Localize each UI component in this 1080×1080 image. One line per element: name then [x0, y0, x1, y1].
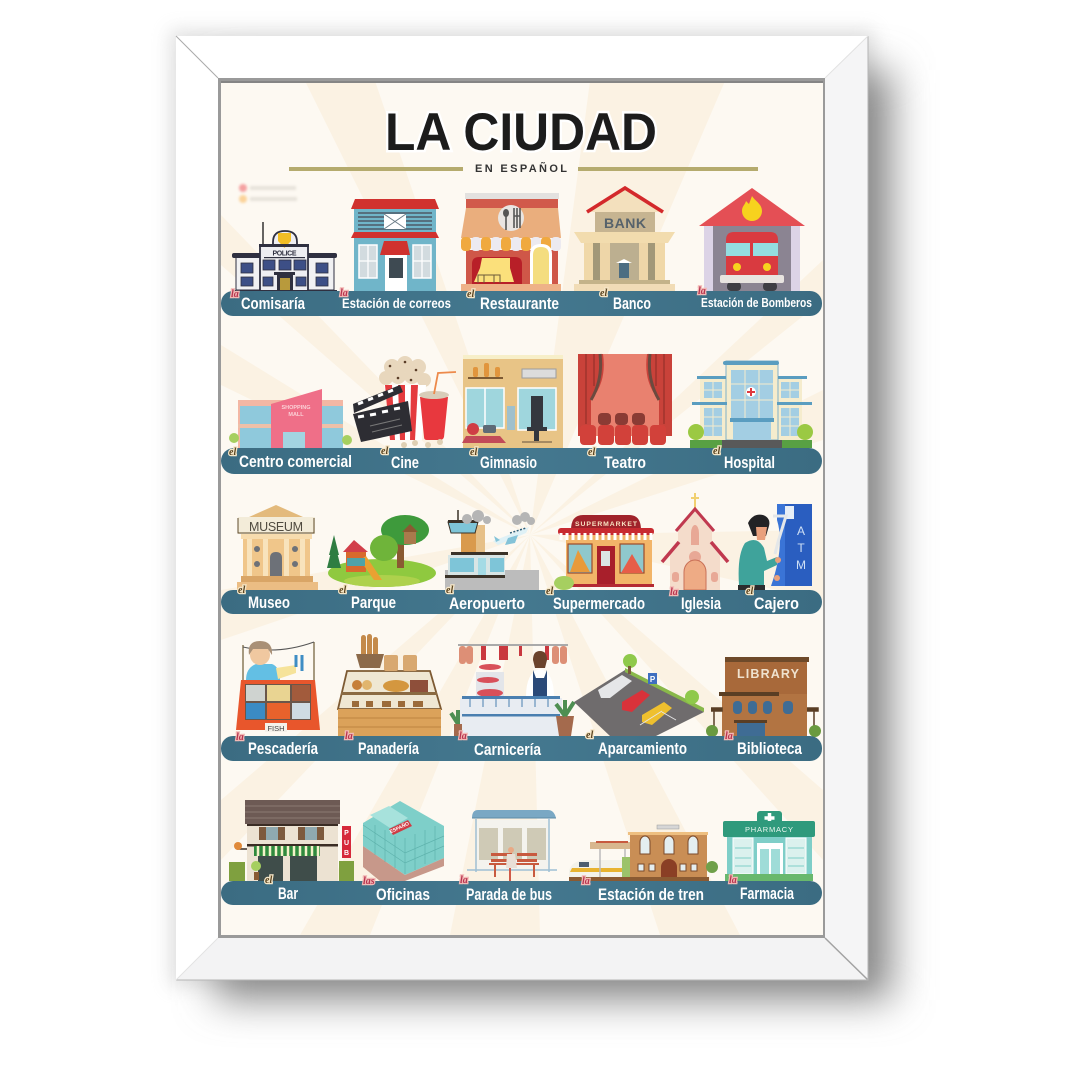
row 2 shelf: el	[588, 447, 595, 458]
icon: ATM with person	[738, 504, 812, 590]
row 1 shelf: Estación de Bomberos	[701, 296, 812, 310]
icon: police station: POLICE	[272, 250, 297, 258]
row 4 shelf: la	[459, 731, 467, 742]
row 2 shelf: Hospital	[724, 453, 775, 472]
row 4 shelf: la	[236, 732, 244, 743]
drop shadow of frame	[170, 30, 892, 1000]
poster background with rays	[221, 78, 823, 935]
icon: church	[662, 493, 728, 590]
row 1 shelf: la	[340, 288, 348, 299]
row 4 shelf: Panadería	[358, 739, 419, 758]
subtitle with rules: EN ESPAÑOL	[475, 162, 567, 175]
icon: bar pub: U	[344, 840, 349, 847]
row 3 shelf: el	[339, 585, 346, 596]
row 2 shelf: el	[229, 447, 236, 458]
row 1 shelf: Estación de correos	[342, 296, 451, 311]
row 2 shelf: Teatro	[604, 453, 646, 472]
row 3 shelf: Parque	[351, 593, 396, 612]
icon: bakery	[338, 634, 441, 736]
row 5 shelf	[221, 875, 822, 905]
row 2 shelf: el	[713, 446, 720, 457]
row 2 shelf: el	[470, 447, 477, 458]
title: LA CIUDAD	[385, 103, 657, 162]
row 3 shelf: la	[670, 587, 678, 598]
icon: library: LIBRARY	[737, 667, 800, 681]
row 4 shelf	[221, 730, 822, 761]
icon: shopping mall: MALL	[288, 412, 304, 418]
icon: office building: ESPAÑO	[388, 820, 410, 835]
row 4 buildings	[236, 634, 821, 737]
row 5 shelf: las	[363, 876, 375, 887]
row 4 shelf: Biblioteca	[737, 739, 802, 758]
icon: car park	[574, 654, 704, 736]
row 5 buildings	[229, 800, 815, 881]
icon: police station	[231, 222, 337, 292]
row 3 shelf: Aeropuerto	[449, 594, 525, 613]
row 3 shelf: el	[446, 585, 453, 596]
row 1 shelf: el	[467, 289, 474, 300]
row 5 shelf: Parada de bus	[466, 885, 552, 904]
icon: office building	[363, 801, 444, 881]
icon: ATM with person: T	[797, 541, 805, 555]
icon: ATM with person: A	[797, 524, 805, 538]
row 4 shelf: Pescadería	[248, 739, 318, 758]
row 3 shelf: el	[238, 585, 245, 596]
icon: airport	[445, 510, 539, 590]
row 1 shelf: Restaurante	[480, 294, 559, 313]
icon: fire station	[699, 188, 805, 291]
row 1 shelf: la	[698, 286, 706, 297]
icon: bar pub: P	[344, 830, 349, 837]
icon: library	[706, 657, 821, 737]
icon: hospital	[688, 361, 813, 448]
row 3 shelf: el	[546, 586, 553, 597]
row 1 shelf: Banco	[613, 294, 651, 313]
icon: bar pub	[229, 800, 354, 881]
icon: theatre	[578, 354, 672, 445]
row 2 shelf: el	[381, 446, 388, 457]
faded legend	[239, 184, 297, 203]
icon: park	[327, 515, 436, 587]
row 3 shelf: Cajero	[754, 594, 799, 613]
row 5 shelf: el	[265, 875, 272, 886]
subtitle with rules	[289, 162, 758, 175]
row 2 shelf: Centro comercial	[239, 452, 352, 471]
icon: shopping mall	[229, 389, 352, 448]
icon: pharmacy: PHARMACY	[745, 825, 793, 834]
row 5 shelf: Estación de tren	[598, 885, 704, 904]
picture frame	[176, 36, 868, 980]
row 5 shelf: la	[582, 876, 590, 887]
icon: supermarket: SUPERMARKET	[575, 521, 638, 528]
row 1 shelf: la	[231, 289, 239, 300]
icon: ATM with person: M	[796, 558, 806, 572]
row 1 shelf: Comisaría	[241, 294, 305, 313]
row 2 buildings	[229, 354, 813, 448]
icon: supermarket	[554, 515, 654, 590]
row 5 shelf: Bar	[278, 884, 298, 903]
icon: bank	[574, 188, 675, 291]
icon: cinema popcorn	[353, 356, 456, 448]
icon: car park: P	[650, 675, 656, 684]
row 2 shelf: Cine	[391, 453, 419, 472]
icon: butcher	[451, 644, 574, 736]
icon: pharmacy	[723, 811, 815, 881]
row 4 shelf: la	[345, 731, 353, 742]
row 1 shelf: el	[600, 288, 607, 299]
row 3 shelf: Supermercado	[553, 594, 645, 613]
row 4 shelf: Aparcamiento	[598, 739, 687, 758]
icon: post office	[351, 199, 439, 291]
row 4 shelf: el	[586, 730, 593, 741]
row 3 shelf: el	[746, 586, 753, 597]
icon: fish stall	[236, 641, 320, 733]
row 2 shelf	[221, 446, 822, 474]
icon: bus stop	[467, 810, 557, 881]
row 5 shelf: Oficinas	[376, 885, 430, 904]
row 5 shelf: la	[460, 875, 468, 886]
row 4 shelf: Carnicería	[474, 740, 541, 759]
row 2 shelf: Gimnasio	[480, 453, 537, 472]
row 3 buildings	[237, 493, 812, 590]
icon: shopping mall: SHOPPING	[281, 405, 311, 411]
icon: museum: MUSEUM	[249, 520, 303, 534]
row 5 shelf: la	[729, 875, 737, 886]
icon: train station	[569, 825, 718, 881]
row 3 shelf	[221, 585, 822, 614]
icon: restaurant	[461, 193, 561, 291]
icon: fish stall: FISH	[267, 724, 285, 733]
icon: museum	[237, 505, 318, 590]
row 4 shelf: la	[725, 731, 733, 742]
row 3 shelf: Museo	[248, 593, 290, 612]
row 1 buildings	[231, 188, 805, 292]
icon: bank: BANK	[604, 215, 646, 231]
row 5 shelf: Farmacia	[740, 884, 794, 903]
icon: gym	[462, 355, 563, 448]
row 3 shelf: Iglesia	[681, 594, 721, 613]
icon: bar pub: B	[344, 850, 349, 857]
row 1 shelf	[221, 286, 822, 316]
